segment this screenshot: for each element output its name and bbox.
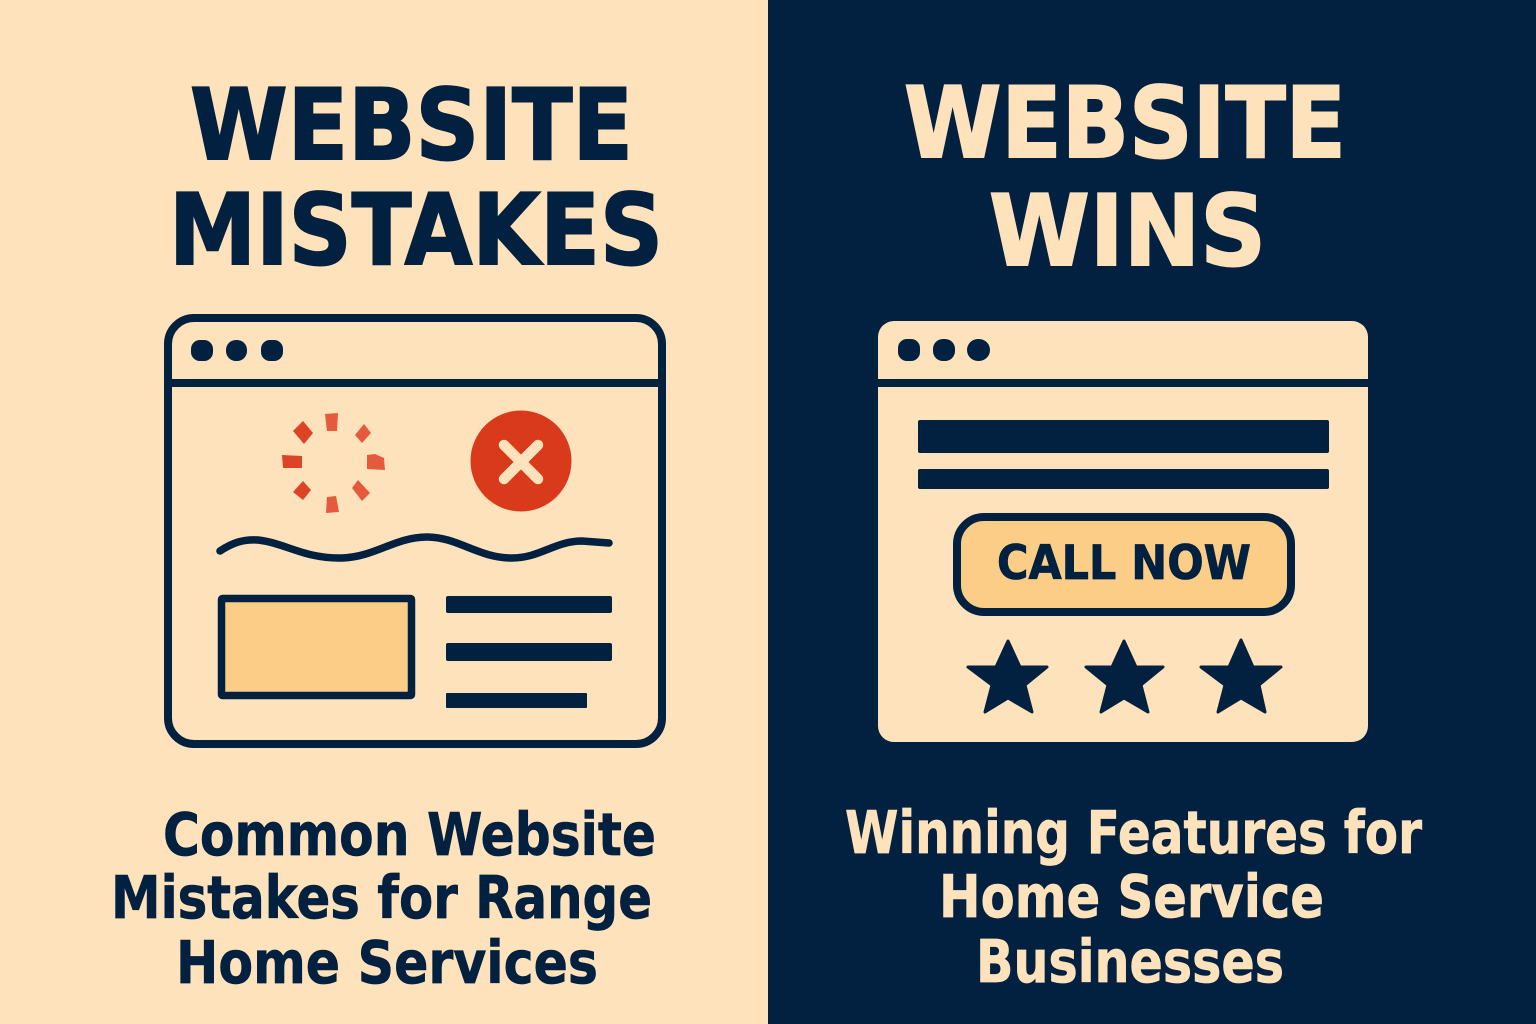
heading: website mistakes: WEBSITE bbox=[190, 69, 633, 183]
caption: winning features bbox=[845, 798, 1422, 996]
caption: winning features: Home Service bbox=[939, 862, 1324, 931]
panel: website wins bbox=[768, 0, 1536, 1024]
caption: winning features: Businesses bbox=[976, 927, 1284, 996]
icon: winning browser window bbox=[878, 321, 1368, 742]
caption: common website mistakes: Mistakes for Range bbox=[111, 863, 652, 932]
image placeholder bbox=[222, 598, 412, 696]
browser dots bbox=[191, 340, 283, 361]
icon: broken browser window bbox=[168, 318, 662, 744]
text lines bbox=[446, 596, 612, 708]
icon: error circle with x bbox=[470, 410, 572, 512]
caption: common website mistakes bbox=[111, 800, 656, 997]
wavy broken headline bbox=[220, 537, 609, 558]
button: call now bbox=[957, 517, 1291, 612]
panel: website mistakes bbox=[0, 0, 768, 1024]
browser dots bbox=[898, 339, 990, 361]
headline bars bbox=[918, 420, 1329, 489]
caption: winning features: Winning Features for bbox=[845, 798, 1422, 867]
icon: loading spinner bbox=[282, 413, 385, 513]
caption: common website mistakes: Common Website bbox=[163, 800, 656, 869]
button: call now: CALL NOW bbox=[997, 536, 1251, 591]
heading: website mistakes bbox=[169, 69, 663, 288]
heading: website wins: WEBSITE bbox=[904, 67, 1346, 181]
icon: three stars bbox=[968, 640, 1281, 712]
caption: common website mistakes: Home Services bbox=[176, 928, 598, 997]
heading: website wins: WINS bbox=[989, 175, 1266, 289]
heading: website wins bbox=[904, 67, 1346, 289]
heading: website mistakes: MISTAKES bbox=[169, 174, 663, 288]
